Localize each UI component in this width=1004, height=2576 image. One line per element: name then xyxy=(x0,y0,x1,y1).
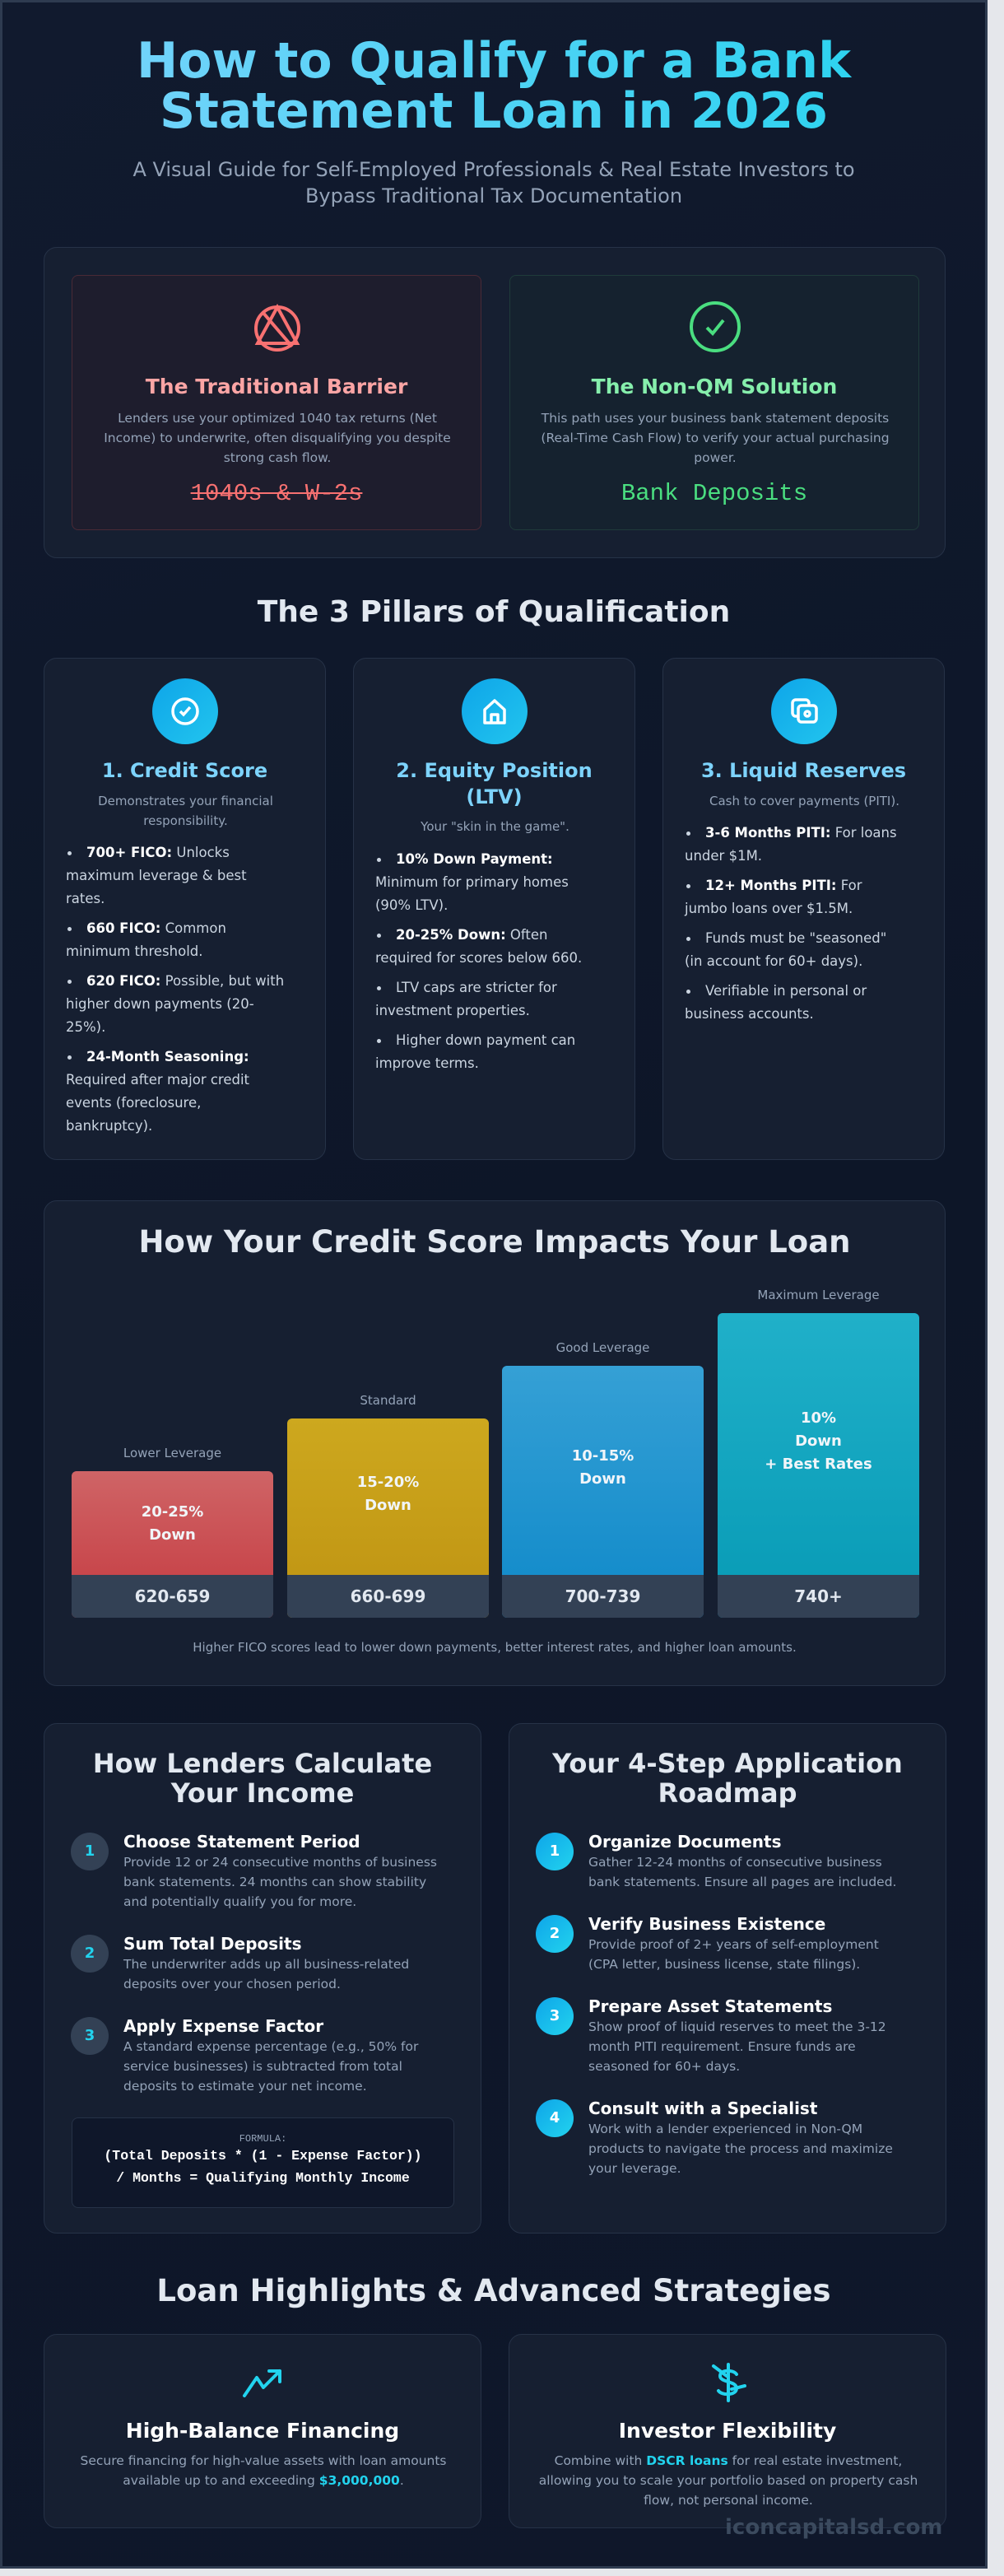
panel: pillar 3 reserves xyxy=(662,658,945,1160)
panel: application roadmap: Prepare Asset Statements xyxy=(588,1996,832,2016)
formula box: / Months = Qualifying Monthly Income xyxy=(116,2170,410,2186)
icon: trending up xyxy=(242,2369,281,2397)
panel: application roadmap: 4 xyxy=(550,2109,560,2126)
step 1 xyxy=(536,1832,896,1889)
subtitle: Demonstrates your financial responsibility. xyxy=(98,794,273,828)
subtitle: Cash to cover payments (PITI). xyxy=(709,794,899,808)
panel: application roadmap: Consult with a Specialist xyxy=(588,2099,817,2118)
bar: 620-659: Down xyxy=(149,1526,196,1544)
heading: The Non-QM Solution xyxy=(592,375,837,398)
icon: dollar xyxy=(711,2363,746,2402)
title: 1. Credit Score xyxy=(102,759,267,782)
panel: income calculation: 1 xyxy=(85,1842,95,1860)
label: bank deposits: Bank Deposits xyxy=(621,480,807,507)
panel: income calculation: The underwriter adds up all business-related deposits over your chosen period. xyxy=(123,1957,409,1991)
panel: income calculation xyxy=(44,1723,481,2234)
step 4 xyxy=(536,2099,893,2176)
bar: 700-739: Down xyxy=(579,1470,626,1488)
step 2 xyxy=(536,1914,879,1972)
bar label: lower leverage: Lower Leverage xyxy=(123,1446,221,1460)
bullet list: 12+ Months PITI: For jumbo loans over $1.5M. xyxy=(685,878,862,916)
watermark: iconcapitalsd.com xyxy=(725,2515,942,2540)
title: Statement Loan in 2026 xyxy=(160,82,828,140)
heading: highlights: Loan Highlights & Advanced Strategies xyxy=(156,2273,831,2308)
heading: The Traditional Barrier xyxy=(146,375,407,398)
bullet list: LTV caps are stricter for investment properties. xyxy=(375,980,557,1018)
text: Combine with DSCR loans for real estate investment, allowing you to scale your portfolio based on property cash flow, not personal income. xyxy=(539,2453,918,2508)
panel: application roadmap: Gather 12-24 months of consecutive business bank statements. Ensure all pages are included. xyxy=(588,1855,896,1889)
bullet list: Higher down payment can improve terms. xyxy=(375,1032,575,1071)
panel: application roadmap: Verify Business Existence xyxy=(588,1914,825,1934)
text: Lenders use your optimized 1040 tax returns (Net Income) to underwrite, often disqualifying you despite strong cash flow. xyxy=(104,411,451,465)
heading xyxy=(93,1748,432,1809)
panel: application roadmap: Organize Documents xyxy=(588,1832,781,1852)
bar: 660-699: 660-699 xyxy=(351,1586,425,1606)
heading: How Lenders Calculate xyxy=(93,1748,432,1779)
heading: pillars: The 3 Pillars of Qualification xyxy=(258,595,730,629)
formula box xyxy=(72,2117,454,2208)
bar: 740+: 740+ xyxy=(794,1586,843,1606)
bar: 660-699: Down xyxy=(365,1497,411,1514)
bar: 740+: Down xyxy=(795,1432,842,1450)
heading: Your 4-Step Application xyxy=(552,1748,903,1779)
heading: Your Income xyxy=(171,1777,354,1809)
title: Investor Flexibility xyxy=(619,2419,836,2443)
label: 1040s: 1040s & W-2s xyxy=(191,480,362,507)
panel: income calculation: 2 xyxy=(85,1945,95,1962)
bullet list: 3-6 Months PITI: For loans under $1M. xyxy=(685,825,897,864)
card: traditional barrier xyxy=(72,275,481,530)
bullet list: 660 FICO: Common minimum threshold. xyxy=(66,920,226,959)
card: non-QM solution xyxy=(509,275,919,530)
bullet list: 620 FICO: Possible, but with higher down payments (20-25%). xyxy=(66,973,284,1035)
text: This path uses your business bank statement deposits (Real-Time Cash Flow) to verify your actual purchasing power. xyxy=(541,411,890,465)
formula box: FORMULA: xyxy=(239,2133,286,2145)
subtitle: Your "skin in the game". xyxy=(421,819,569,834)
bar chart xyxy=(72,1288,919,1618)
panel: credit score chart xyxy=(44,1200,946,1686)
title: High-Balance Financing xyxy=(126,2419,399,2443)
icon: badge check xyxy=(152,678,218,744)
panel: income calculation: 3 xyxy=(85,2027,95,2044)
bar: 700-739: 10-15% xyxy=(572,1447,634,1465)
panel: pillar 1 credit score xyxy=(44,658,326,1160)
bar: 620-659 xyxy=(72,1471,273,1618)
step 3 xyxy=(536,1996,886,2074)
bullet list: Funds must be "seasoned" (in account for 60+ days). xyxy=(685,930,886,969)
bullet list: 10% Down Payment: Minimum for primary homes (90% LTV). xyxy=(375,851,569,913)
bullet list xyxy=(66,845,284,1134)
panel: application roadmap: 1 xyxy=(550,1842,560,1860)
bullet list: 24-Month Seasoning: Required after major credit events (foreclosure, bankruptcy). xyxy=(66,1049,249,1134)
step 1 xyxy=(71,1832,437,1909)
panel: barrier vs solution xyxy=(44,247,946,558)
bar: 740+ xyxy=(718,1313,919,1618)
panel: pillar 2 equity xyxy=(353,658,635,1160)
footnote: Higher FICO scores lead to lower down payments, better interest rates, and higher loan amounts. xyxy=(193,1640,797,1655)
subtitle: A Visual Guide for Self-Employed Professionals & Real Estate Investors to xyxy=(132,158,855,181)
card: investor flexibility xyxy=(509,2334,946,2528)
bullet list: Verifiable in personal or business accounts. xyxy=(685,983,867,1022)
step 2 xyxy=(71,1934,409,1991)
bar label: max leverage: Maximum Leverage xyxy=(757,1288,880,1302)
panel: application roadmap: Work with a lender experienced in Non-QM products to navigate the process and maximize your leverage. xyxy=(588,2122,893,2176)
panel: income calculation: Provide 12 or 24 consecutive months of business bank statements. 24 months can show stability and potentially qualify you for more. xyxy=(123,1855,437,1909)
panel: income calculation: Sum Total Deposits xyxy=(123,1934,301,1954)
bar: 700-739: 700-739 xyxy=(565,1586,640,1606)
title xyxy=(2,36,985,137)
panel: income calculation: A standard expense percentage (e.g., 50% for service businesses) is subtracted from total deposits to estimate your net income. xyxy=(123,2039,418,2094)
title: 2. Equity Position xyxy=(396,759,593,782)
heading xyxy=(551,1748,903,1809)
bar: 620-659: 20-25% xyxy=(142,1503,203,1521)
bullet list xyxy=(685,825,897,1022)
bar: 700-739 xyxy=(502,1366,704,1618)
bullet list xyxy=(375,851,582,1071)
bar label: standard: Standard xyxy=(360,1393,416,1408)
subtitle xyxy=(132,158,855,207)
panel: income calculation: Choose Statement Period xyxy=(123,1832,360,1852)
panel: application roadmap: 2 xyxy=(550,1925,560,1942)
bullet list: 20-25% Down: Often required for scores below 660. xyxy=(375,927,582,966)
bar label: good leverage: Good Leverage xyxy=(556,1340,649,1355)
bar: 620-659: 620-659 xyxy=(135,1586,210,1606)
formula box: (Total Deposits * (1 - Expense Factor)) xyxy=(104,2148,422,2164)
icon: cash xyxy=(771,678,837,744)
bar: 740+: + Best Rates xyxy=(765,1456,872,1473)
chart title: How Your Credit Score Impacts Your Loan xyxy=(138,1224,851,1260)
panel: application roadmap: Show proof of liquid reserves to meet the 3-12 month PITI requirement. Ensure funds are seasoned for 60+ days. xyxy=(588,2019,886,2074)
title xyxy=(396,759,593,808)
panel: application roadmap xyxy=(509,1723,946,2234)
icon: house xyxy=(462,678,528,744)
bar: 660-699 xyxy=(287,1418,489,1618)
bar: 660-699: 15-20% xyxy=(357,1474,419,1491)
step 3 xyxy=(71,2016,418,2094)
title: 3. Liquid Reserves xyxy=(701,759,906,782)
bar: 740+: 10% xyxy=(801,1409,836,1427)
text: Secure financing for high-value assets with loan amounts available up to and exceeding $3,000,000. xyxy=(80,2453,446,2488)
title: (LTV) xyxy=(466,785,523,808)
card: high-balance financing xyxy=(44,2334,481,2528)
panel: application roadmap: Provide proof of 2+ years of self-employment (CPA letter, business license, state filings). xyxy=(588,1937,879,1972)
panel: application roadmap: 3 xyxy=(550,2007,560,2024)
panel: income calculation: Apply Expense Factor xyxy=(123,2016,323,2036)
heading: Roadmap xyxy=(658,1777,797,1809)
bullet list: 700+ FICO: Unlocks maximum leverage & best rates. xyxy=(66,845,247,906)
icon: warning barrier xyxy=(254,304,300,352)
title: How to Qualify for a Bank xyxy=(137,32,851,90)
subtitle: Bypass Traditional Tax Documentation xyxy=(305,184,682,207)
icon: check xyxy=(690,301,741,352)
